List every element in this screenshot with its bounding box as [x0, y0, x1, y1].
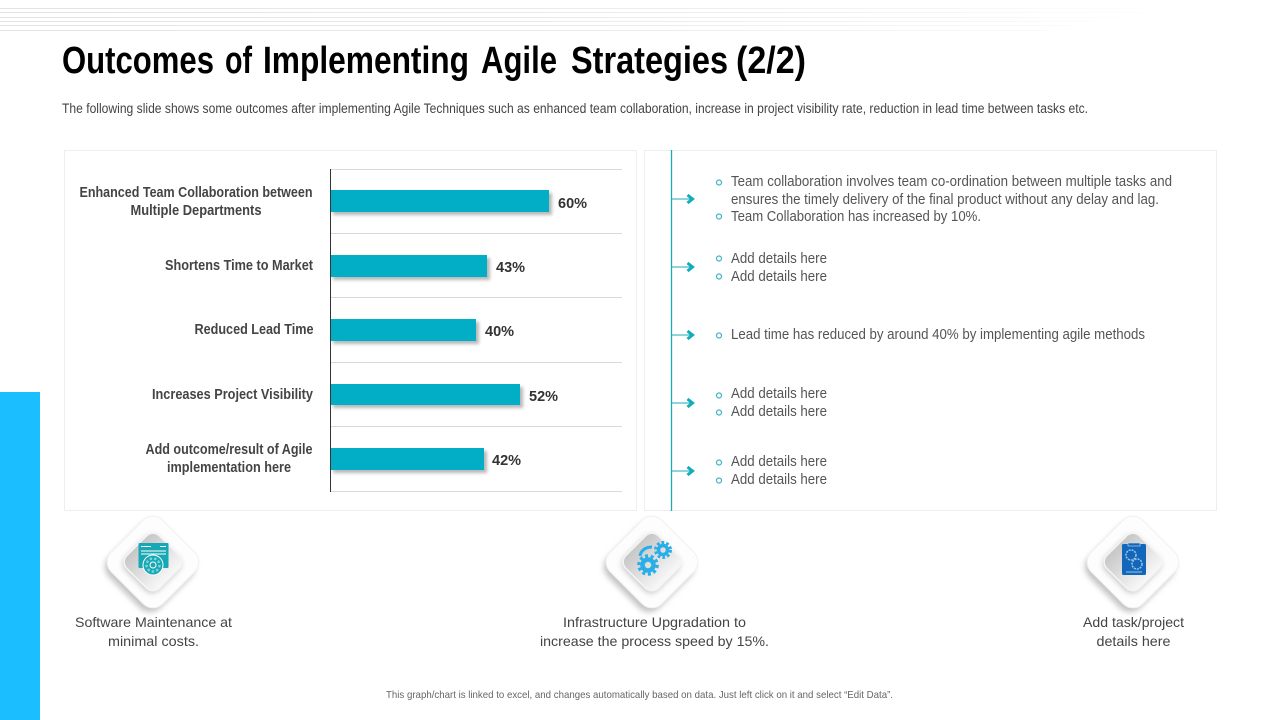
caption	[75, 614, 232, 649]
caption	[1083, 614, 1184, 649]
bar: Shortens Time to Market 43%	[331, 255, 525, 280]
subtitle: The following slide shows some outcomes after implementing Agile Techniques such as enhanced team collaboration, increase in project visibility rate, reduction in lead time between tasks etc.	[62, 101, 1088, 116]
detail text: Add details here	[731, 386, 827, 402]
detail text: ensures the timely delivery of the final product without any delay and lag.	[731, 192, 1159, 208]
bar: Add outcome 42%	[331, 448, 521, 473]
item: add task	[1079, 510, 1185, 649]
caption: increase the process speed by 15%.	[540, 633, 769, 649]
bar: Add outcome 42%: 42%	[492, 453, 521, 469]
title: Outcomes	[62, 40, 214, 82]
left accent bar	[0, 392, 40, 720]
panel: details list	[644, 150, 1216, 511]
title: Agile	[481, 40, 557, 82]
category labels: Add outcome/result of Agile	[146, 442, 312, 458]
bar: Enhanced Team Collaboration 60%	[331, 190, 587, 215]
title: (2/2)	[736, 40, 806, 82]
title: of	[225, 40, 252, 82]
detail text	[731, 174, 1172, 488]
detail text: Add details here	[731, 472, 827, 488]
decorative top stripes	[0, 8, 1180, 31]
bar: Reduced Lead Time 40%: 40%	[485, 324, 514, 340]
detail text: Team collaboration involves team co-ordination between multiple tasks and	[731, 174, 1172, 190]
category labels: Shortens Time to Market	[165, 258, 313, 274]
detail text: Add details here	[731, 454, 827, 470]
bar: Increases Project Visibility 52%	[331, 384, 558, 408]
category labels: Multiple Departments	[130, 203, 262, 219]
footnote: This graph/chart is linked to excel, and changes automatically based on data. Just left click on it and select “Edit Data”.	[386, 689, 893, 701]
title: Implementing	[263, 40, 469, 82]
caption: minimal costs.	[108, 633, 199, 649]
grid lines and axis	[330, 169, 622, 492]
item: infrastructure upgradation	[540, 510, 769, 649]
caption: Add task/project	[1083, 614, 1184, 630]
detail text: Add details here	[731, 251, 827, 267]
detail text: Lead time has reduced by around 40% by implementing agile methods	[731, 327, 1145, 343]
caption	[540, 614, 769, 649]
bar: Enhanced Team Collaboration 60%: 60%	[558, 196, 587, 212]
caption: details here	[1096, 633, 1171, 649]
detail text: Team Collaboration has increased by 10%.	[731, 209, 981, 225]
bar: Reduced Lead Time 40%	[331, 319, 514, 344]
title: Strategies	[571, 40, 728, 82]
category labels: Reduced Lead Time	[194, 322, 314, 338]
caption: Infrastructure Upgradation to	[563, 614, 746, 630]
arrows	[672, 195, 692, 475]
detail text: Add details here	[731, 269, 827, 285]
title	[62, 40, 806, 82]
bar: Shortens Time to Market 43%: 43%	[496, 260, 525, 276]
icon: gears	[598, 510, 704, 618]
panel: bar chart of outcomes	[64, 150, 636, 510]
item: software maintenance	[75, 510, 232, 649]
detail text: Add details here	[731, 404, 827, 420]
icon: browser window with gear	[99, 510, 205, 618]
timeline line	[670, 150, 672, 511]
bullets	[716, 180, 722, 483]
category labels: Increases Project Visibility	[152, 387, 313, 403]
category labels: Enhanced Team Collaboration between	[80, 185, 312, 201]
caption: Software Maintenance at	[75, 614, 232, 630]
bar: Increases Project Visibility 52%: 52%	[529, 389, 558, 405]
category labels: implementation here	[167, 460, 291, 476]
icon: clipboard with gears	[1079, 510, 1185, 618]
category labels	[80, 185, 314, 476]
